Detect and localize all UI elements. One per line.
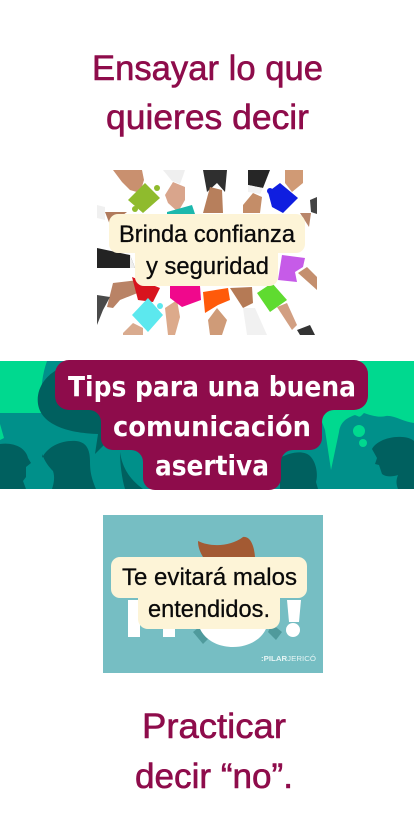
- label: Brinda confianza y seguridad: y seguridad: [146, 253, 269, 280]
- panel: puzzle hands photo: [97, 170, 317, 335]
- heading: Ensayar lo que quieres decir: [92, 49, 323, 137]
- title pill: Tips para una buena comunicación asertiva: asertiva: [155, 449, 269, 482]
- heading: Practicar decir "no": decir “no”.: [135, 757, 293, 796]
- logo: Pilar Jericó: :PILARJERICÓ: [261, 654, 316, 663]
- title pill: Tips para una buena comunicación asertiva: comunicación: [113, 410, 311, 443]
- title pill: Tips para una buena comunicación asertiva: [55, 360, 368, 490]
- heading: Practicar decir "no": Practicar: [142, 707, 286, 746]
- label: Brinda confianza y seguridad: Brinda confianza: [119, 221, 295, 248]
- title pill: Tips para una buena comunicación asertiva: Tips para una buena: [68, 370, 356, 403]
- panel: NO illustration: [103, 515, 323, 673]
- collar shadow: [193, 624, 282, 644]
- hands and sleeves: [97, 170, 317, 335]
- heading: Ensayar lo que quieres decir: quieres decir: [106, 98, 309, 137]
- label: Te evitará malos entendidos: entendidos.: [148, 596, 270, 623]
- banner: speech bubbles and silhouettes: [0, 361, 414, 489]
- puzzle pieces: [128, 183, 305, 332]
- icon: hair: [198, 537, 255, 557]
- speech bubbles: [0, 361, 414, 470]
- label: Te evitará malos entendidos: Te evitará malos: [122, 564, 297, 591]
- heading: Practicar decir "no": [135, 707, 293, 796]
- white NO and exclamation letters: [128, 600, 301, 647]
- heading: Ensayar lo que quieres decir: Ensayar lo que: [92, 49, 323, 88]
- silhouettes: [0, 437, 414, 489]
- label: Brinda confianza y seguridad: [109, 214, 305, 286]
- label: Te evitará malos entendidos: [111, 557, 307, 629]
